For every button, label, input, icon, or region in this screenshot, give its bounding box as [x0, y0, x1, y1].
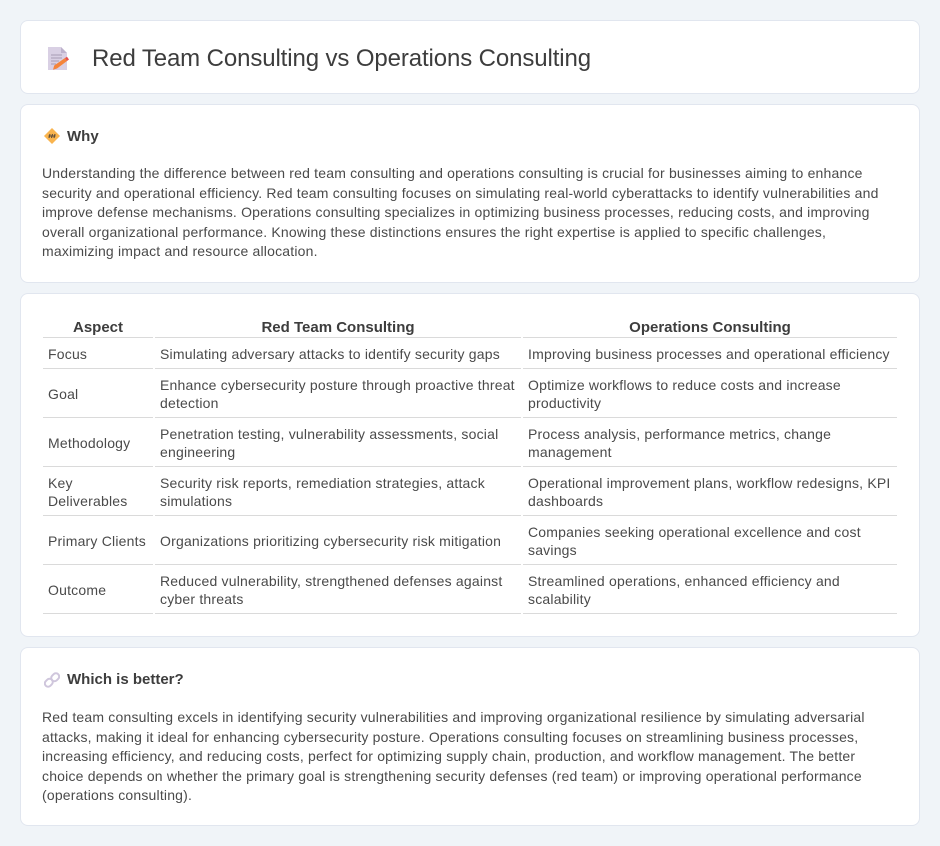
icon: warning diamond: [44, 128, 60, 144]
comparison table: Aspect: [73, 319, 123, 336]
comparison table: Reduced vulnerability, strengthened defenses against: [160, 573, 502, 589]
panel: which is better: [20, 647, 920, 826]
comparison table: Security risk reports, remediation strategies, attack: [160, 475, 485, 491]
comparison table: detection: [160, 395, 219, 411]
text: why paragraph: security and operational efficiency. Red team consulting focuses on simulating real-world cyberattacks to identify vulnerabilities and: [42, 185, 879, 201]
comparison table: simulations: [160, 493, 232, 509]
comparison table: Deliverables: [48, 493, 127, 509]
comparison table: Methodology: [48, 435, 130, 451]
comparison table: Enhance cybersecurity posture through proactive threat: [160, 377, 515, 393]
comparison table: engineering: [160, 444, 235, 460]
comparison table: Streamlined operations, enhanced efficiency and: [528, 573, 840, 589]
icon: document with pencil: [48, 47, 69, 70]
comparison table: Goal: [48, 386, 78, 402]
comparison table: Primary Clients: [48, 533, 146, 549]
panel: why: [20, 104, 920, 283]
comparison table: Improving business processes and operational efficiency: [528, 346, 890, 362]
comparison table: Operational improvement plans, workflow redesigns, KPI: [528, 475, 891, 491]
comparison table: savings: [528, 542, 577, 558]
heading: which is better: Which is better?: [67, 671, 184, 688]
text: which is better paragraph: Red team consulting excels in identifying security vulnerabilities and improving organizational resilience by simulating adversarial: [42, 709, 865, 725]
comparison table: Process analysis, performance metrics, change: [528, 426, 831, 442]
text: which is better paragraph: (operations consulting).: [42, 787, 192, 803]
comparison table: Operations Consulting: [629, 319, 791, 336]
title heading: Red Team Consulting vs Operations Consulting: [92, 45, 591, 72]
text: why paragraph: [42, 165, 879, 259]
comparison table: [43, 319, 897, 614]
text: which is better paragraph: increasing efficiency, and reducing costs, perfect for optimizing supply chain, production, and workflow management. The better: [42, 748, 855, 764]
comparison table: scalability: [528, 591, 591, 607]
comparison table: Optimize workflows to reduce costs and increase: [528, 377, 841, 393]
comparison table: productivity: [528, 395, 601, 411]
comparison table: Penetration testing, vulnerability assessments, social: [160, 426, 498, 442]
comparison table: Outcome: [48, 582, 106, 598]
comparison table: Organizations prioritizing cybersecurity risk mitigation: [160, 533, 501, 549]
text: why paragraph: Understanding the difference between red team consulting and operations consulting is crucial for businesses aiming to enhance: [42, 165, 863, 181]
icon: chain link: [44, 672, 60, 688]
panel: title: [20, 20, 920, 94]
comparison table: Simulating adversary attacks to identify security gaps: [160, 346, 500, 362]
text: which is better paragraph: attacks, making it ideal for enhancing cybersecurity posture. Operations consulting focuses on streamlining business processes,: [42, 729, 858, 745]
text: which is better paragraph: choice depends on whether the primary goal is strengthening security defenses (red team) or improving operational performance: [42, 768, 862, 784]
text: which is better paragraph: [42, 709, 865, 803]
comparison table: Key: [48, 475, 73, 491]
comparison table: Companies seeking operational excellence and cost: [528, 524, 861, 540]
comparison table: cyber threats: [160, 591, 244, 607]
comparison table: Focus: [48, 346, 87, 362]
text: why paragraph: maximizing impact and resource allocation.: [42, 243, 318, 259]
text: why paragraph: improve defense mechanisms. Operations consulting specializes in optimizing business processes, reducing costs, and improving: [42, 204, 870, 220]
text: why paragraph: overall organizational performance. Knowing these distinctions ensures the right expertise is applied to specific challenges,: [42, 224, 826, 240]
comparison table: management: [528, 444, 612, 460]
heading: why: Why: [67, 128, 99, 145]
comparison table: Red Team Consulting: [261, 319, 415, 336]
comparison table: dashboards: [528, 493, 603, 509]
panel: comparison table: [20, 293, 920, 637]
